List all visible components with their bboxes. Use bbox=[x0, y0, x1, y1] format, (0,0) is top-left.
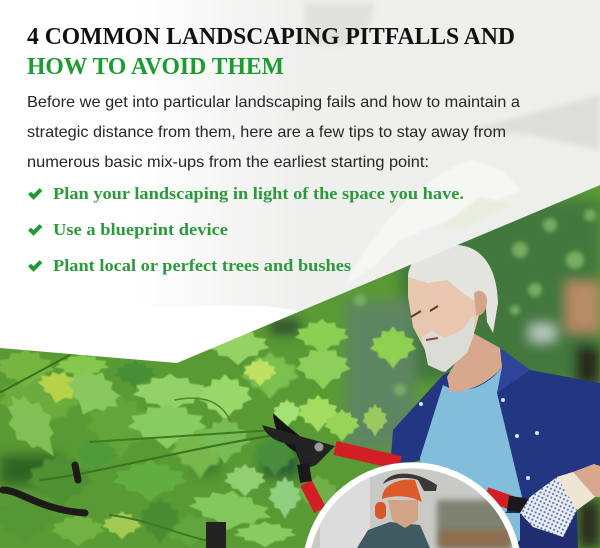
title: 4 COMMON LANDSCAPING PITFALLS AND bbox=[27, 24, 515, 50]
man's ear bbox=[474, 291, 487, 315]
man's t-shirt bbox=[420, 367, 522, 548]
foliage leaves bbox=[0, 319, 416, 547]
faded photo shapes bbox=[305, 3, 600, 285]
man's beard bbox=[421, 315, 474, 372]
vines and branches bbox=[1, 355, 275, 548]
blurred garden backdrop bbox=[0, 200, 600, 548]
shirt buttons bbox=[419, 398, 539, 480]
item 1: Plan your landscaping in light of the space you have. bbox=[53, 184, 464, 203]
top white panel with faded photo bbox=[0, 0, 600, 363]
worker's jacket bbox=[357, 522, 430, 548]
worker's visor bbox=[383, 474, 437, 491]
checklist bbox=[30, 184, 464, 275]
intro paragraph: Before we get into particular landscaping fails and how to maintain a bbox=[27, 94, 520, 111]
intro paragraph: numerous basic mix-ups from the earliest starting point: bbox=[27, 154, 429, 171]
man's hair bbox=[408, 245, 498, 333]
icon: check 2 bbox=[30, 226, 41, 233]
icon: check 1 bbox=[30, 190, 41, 197]
title bbox=[27, 24, 515, 80]
item 2: Use a blueprint device bbox=[53, 220, 228, 239]
man's head bbox=[408, 270, 483, 372]
item 3: Plant local or perfect trees and bushes bbox=[53, 256, 351, 275]
man's facial details bbox=[411, 306, 438, 317]
title: HOW TO AVOID THEM bbox=[27, 54, 284, 80]
man's forearm bbox=[573, 464, 600, 497]
intro paragraph bbox=[27, 94, 520, 171]
intro paragraph: strategic distance from them, here are a few tips to stay away from bbox=[27, 124, 506, 141]
white ring bbox=[305, 462, 519, 548]
man's neck bbox=[447, 333, 502, 392]
loppers bbox=[262, 413, 527, 510]
mottled foliage in the distance bbox=[354, 209, 596, 396]
man's jacket bbox=[390, 348, 600, 548]
inset portrait: arborist in helmet bbox=[305, 462, 519, 548]
worker's face bbox=[388, 500, 418, 528]
glove bbox=[520, 472, 595, 537]
worker's helmet bbox=[382, 480, 422, 502]
under-layer leaves bbox=[0, 352, 299, 547]
worker's ear muffs bbox=[375, 502, 386, 519]
icon: check 3 bbox=[30, 262, 41, 269]
photo: man pruning with loppers bbox=[262, 245, 600, 548]
